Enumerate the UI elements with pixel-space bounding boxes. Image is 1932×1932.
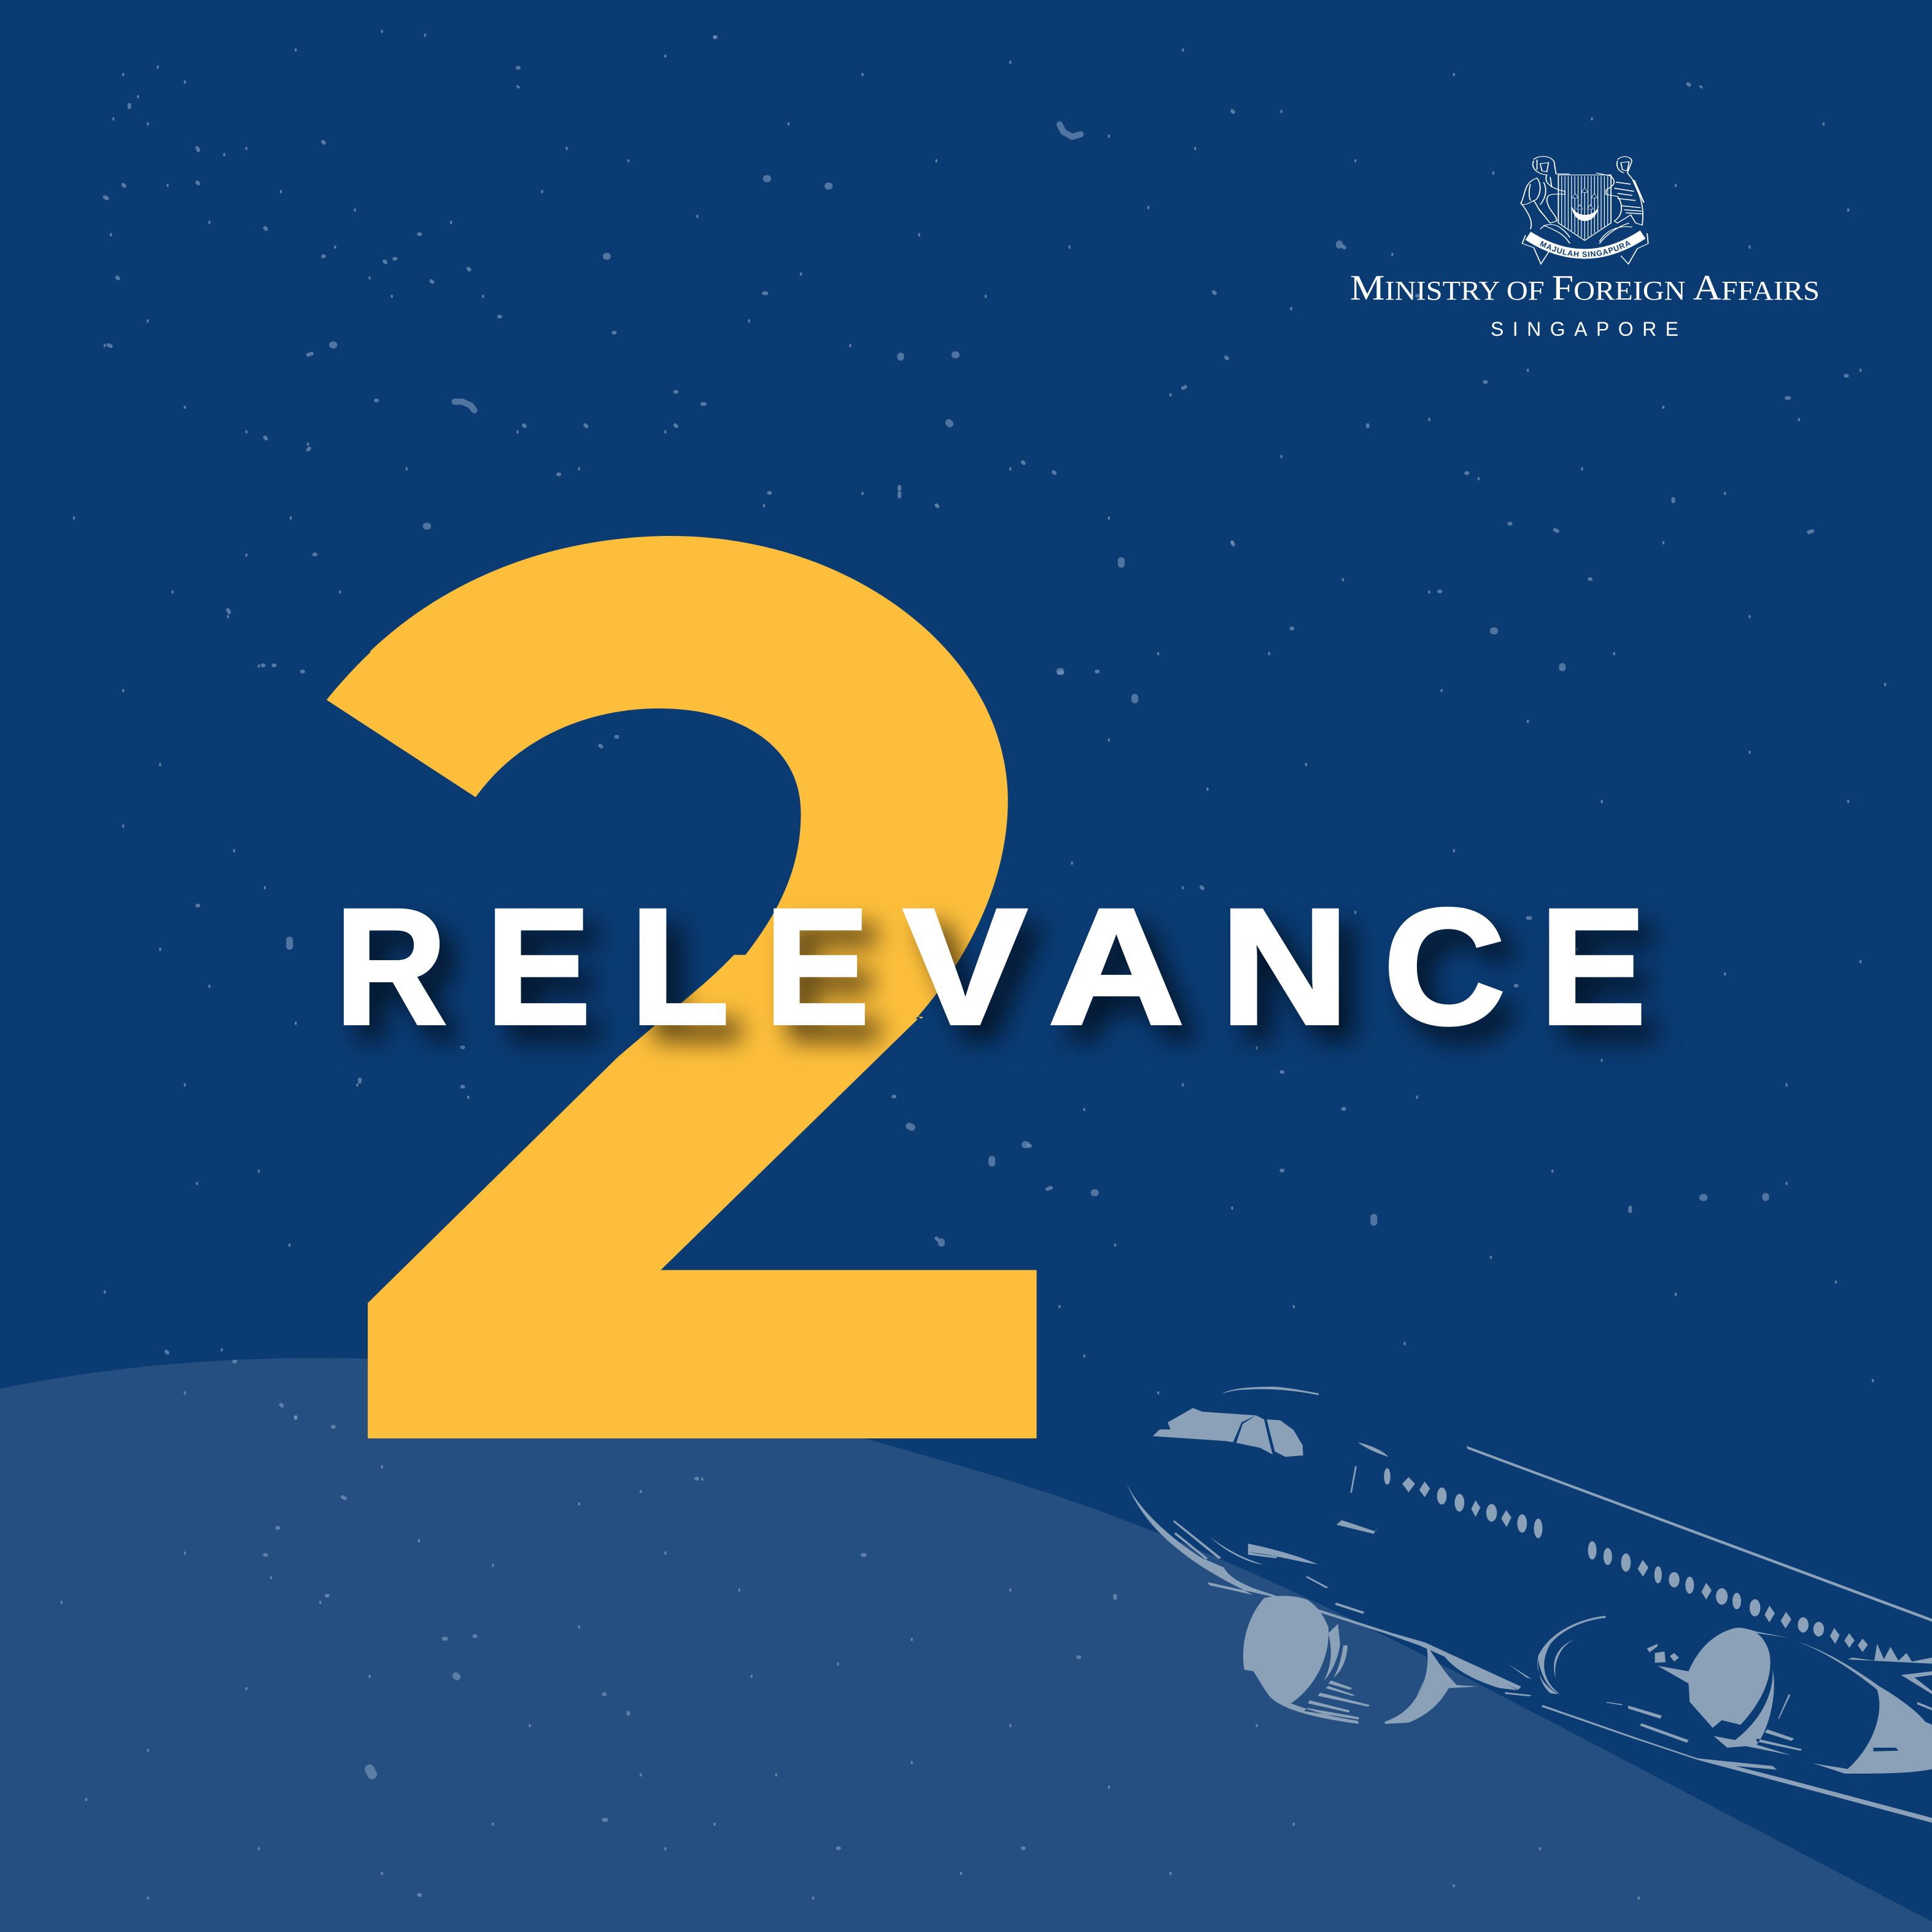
singapore: SINGAPORE bbox=[1491, 318, 1678, 340]
ministry name: MINISTRY OF FOREIGN AFFAIRS bbox=[1350, 268, 1820, 308]
ribbon motto: MAJULAH SINGAPURA bbox=[1540, 241, 1631, 257]
numeral 2 bbox=[268, 307, 1146, 1726]
title word: RELEVANCE: C bbox=[1384, 874, 1505, 1058]
title word: RELEVANCE: R bbox=[335, 874, 446, 1058]
title word: RELEVANCE: A bbox=[1049, 874, 1184, 1058]
right engine rear cowl bbox=[1795, 1641, 1932, 1774]
title word: RELEVANCE: E bbox=[765, 874, 869, 1058]
title word: RELEVANCE: N bbox=[1220, 874, 1349, 1058]
title word: RELEVANCE bbox=[335, 874, 1667, 1060]
logo: Ministry of Foreign Affairs Singapore bbox=[1350, 156, 1820, 340]
airplane illustration bbox=[1127, 1387, 1932, 1823]
fuselage top line bbox=[1467, 1446, 1932, 1622]
cabin windows bbox=[1384, 1468, 1868, 1652]
title word: RELEVANCE: L bbox=[630, 874, 729, 1058]
numeral trim bbox=[327, 518, 1041, 1306]
rear left engine ring bbox=[1384, 1644, 1532, 1724]
right engine bbox=[1647, 1627, 1802, 1755]
wing root fairings bbox=[1848, 1644, 1932, 1710]
hill bbox=[0, 1358, 1932, 1932]
left engine bbox=[1243, 1596, 1370, 1724]
numeral glyph: 2 bbox=[268, 307, 1146, 1726]
crest bbox=[1520, 156, 1649, 265]
title word: RELEVANCE: E bbox=[486, 874, 591, 1058]
shield and supporters bbox=[1521, 157, 1648, 264]
mid nacelle arcs bbox=[1537, 1616, 1605, 1694]
nose and belly lines bbox=[1127, 1483, 1932, 1823]
title word: RELEVANCE: V bbox=[904, 874, 1026, 1058]
ribbon bbox=[1528, 235, 1643, 254]
title word: RELEVANCE: E bbox=[1540, 874, 1646, 1058]
cockpit windows bbox=[1153, 1387, 1388, 1534]
